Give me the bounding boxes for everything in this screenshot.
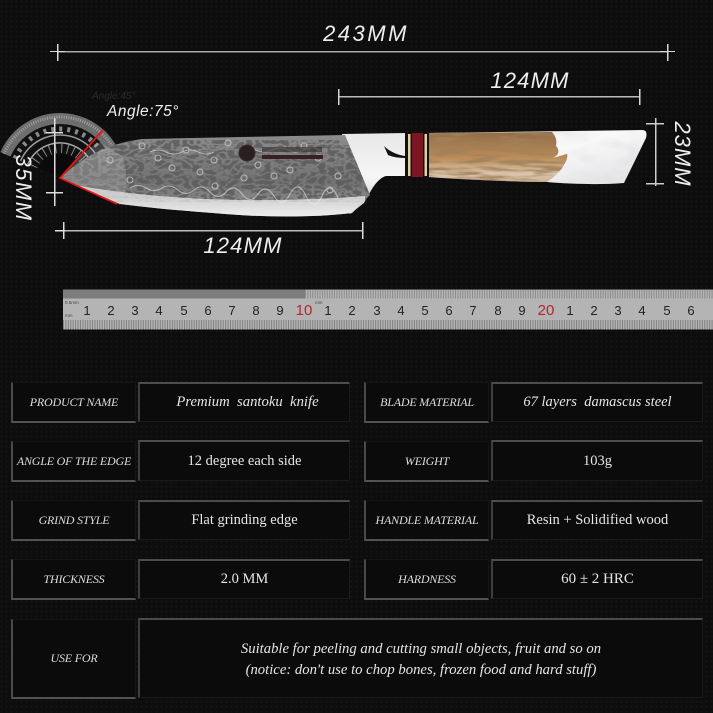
ruler numbers: 1 — [83, 303, 91, 318]
row: angle of the edge label — [11, 441, 136, 482]
ruler numbers: 2 — [590, 303, 598, 318]
ruler numbers: 6 — [204, 303, 212, 318]
ruler numbers: 4 — [397, 303, 405, 318]
row: blade material value — [491, 382, 703, 422]
handle spacer rings — [405, 133, 429, 177]
ruler numbers: 3 — [373, 303, 381, 318]
ruler numbers: 5 — [421, 303, 429, 318]
row: product name value — [138, 382, 350, 422]
ruler numbers: 3 — [131, 303, 139, 318]
row: angle of the edge value: 12 degree each side — [188, 452, 301, 468]
ruler numbers: 7 — [469, 303, 477, 318]
ruler numbers: 2 — [348, 303, 356, 318]
row: use for value: Suitable for peeling and cutting small objects, fruit and so on — [241, 640, 601, 656]
ruler: mm — [315, 300, 323, 305]
ruler numbers: 10 — [296, 302, 312, 319]
row: product name value: Premium santoku knife — [176, 394, 319, 410]
row: grind style value — [138, 500, 350, 540]
row: weight label: WEIGHT — [405, 454, 449, 468]
ruler numbers: 9 — [518, 303, 526, 318]
dimension: blade length 124MM: 124MM — [203, 233, 283, 258]
ruler numbers: 4 — [155, 303, 163, 318]
row: handle material label: HANDLE MATERIAL — [376, 512, 478, 526]
bolster shadow — [384, 146, 405, 158]
dimension: overall length 243MM: 243MM — [322, 21, 409, 46]
ruler numbers: 2 — [107, 303, 115, 318]
row: grind style label — [11, 500, 136, 541]
protractor — [0, 92, 146, 204]
knife — [62, 130, 646, 216]
row: thickness value: 2.0 MM — [221, 571, 268, 587]
wood handle — [428, 132, 568, 182]
row: use for label — [11, 619, 136, 699]
dimension: blade height 35MM: 35MM — [11, 154, 36, 222]
row: grind style value: Flat grinding edge — [191, 512, 298, 528]
row: handle material value — [491, 500, 703, 540]
row: blade material label: BLADE MATERIAL — [380, 394, 474, 408]
row: use for value — [138, 618, 703, 698]
row: weight value: 103g — [583, 452, 612, 468]
ruler: mm — [65, 313, 73, 318]
ruler numbers — [83, 302, 695, 319]
ruler numbers: 7 — [228, 303, 236, 318]
row: thickness label — [11, 559, 136, 600]
ruler numbers: 5 — [180, 303, 188, 318]
ruler numbers: 8 — [494, 303, 502, 318]
dimension: handle length 124MM: 124MM — [490, 68, 570, 93]
row: use for value: (notice: don't use to chop bones, frozen food and hard stuff) — [246, 662, 596, 678]
row: blade material value: 67 layers damascus steel — [523, 394, 672, 410]
row: thickness label: THICKNESS — [44, 572, 104, 586]
row: handle material label — [364, 500, 489, 541]
blade — [62, 135, 370, 216]
row: use for label: USE FOR — [51, 651, 97, 665]
row: handle material value: Resin + Solidified wood — [527, 512, 668, 528]
angle label: Angle:75° — [106, 103, 179, 120]
red angle lines — [60, 130, 117, 204]
bolster — [342, 133, 408, 214]
row: hardness label — [364, 559, 489, 600]
row: angle of the edge value — [138, 440, 350, 481]
faint angle label: Angle:45° — [91, 91, 135, 102]
ruler numbers: 3 — [614, 303, 622, 318]
row: weight value — [491, 440, 703, 481]
logo on blade — [239, 145, 323, 161]
ruler numbers: 6 — [687, 303, 695, 318]
row: product name label: PRODUCT NAME — [30, 394, 118, 408]
row: thickness value — [138, 559, 350, 599]
ruler numbers: 20 — [538, 302, 554, 319]
row: product name label — [11, 382, 136, 423]
row: hardness value — [491, 559, 703, 599]
ruler: 0.5mm — [65, 300, 79, 305]
row: blade material label — [364, 382, 489, 423]
row: weight label — [364, 441, 489, 482]
ruler numbers: 1 — [566, 303, 574, 318]
ruler numbers: 8 — [252, 303, 260, 318]
ruler numbers: 5 — [663, 303, 671, 318]
row: hardness value: 60 ± 2 HRC — [561, 571, 634, 587]
knife diagram with dimensions — [0, 21, 713, 330]
dimension: blade height 35MM — [11, 118, 63, 222]
ruler — [63, 290, 713, 330]
dimension: handle height 23MM — [646, 118, 695, 187]
dimension: handle height 23MM: 23MM — [670, 120, 695, 187]
row: hardness label: HARDNESS — [398, 572, 456, 586]
ruler numbers: 6 — [445, 303, 453, 318]
row: grind style label: GRIND STYLE — [39, 512, 109, 526]
protractor seen through blade tip — [60, 142, 126, 205]
ruler numbers: 4 — [638, 303, 646, 318]
resin handle — [428, 130, 646, 184]
ruler numbers: 9 — [276, 303, 284, 318]
ruler numbers: 1 — [324, 303, 332, 318]
row: angle of the edge label: ANGLE OF THE EDGE — [17, 454, 131, 468]
